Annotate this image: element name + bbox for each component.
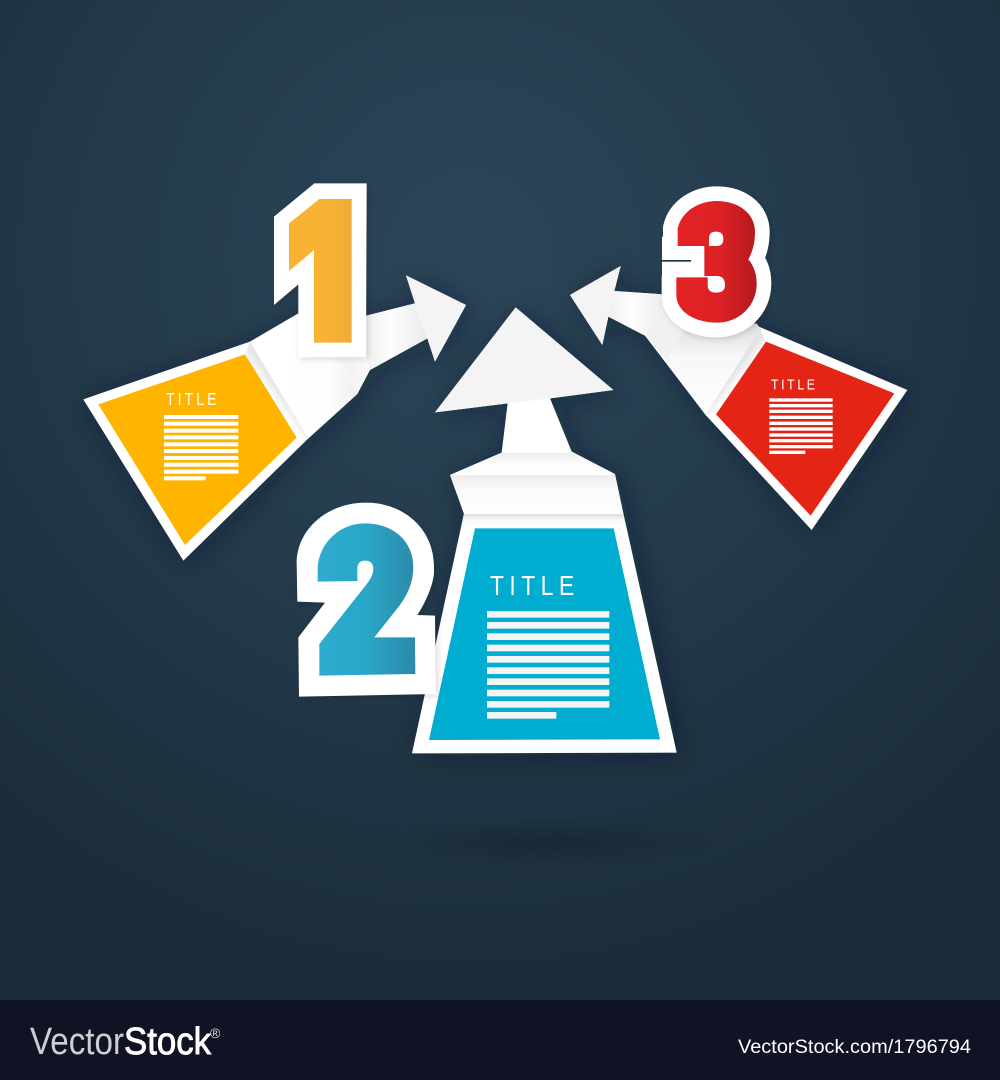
ground shadow — [375, 818, 725, 866]
arrow body — [570, 266, 907, 530]
footer logo: Vector — [30, 1021, 124, 1063]
number 2 — [297, 503, 436, 697]
shoulder fold — [450, 453, 615, 475]
arrow body — [83, 275, 466, 561]
middle fold — [667, 323, 762, 415]
blue panel — [429, 528, 660, 740]
shaft shading — [366, 303, 427, 370]
footer bar — [0, 1000, 1000, 1080]
panel edge fold — [462, 514, 627, 530]
footer logo: Stock — [124, 1021, 212, 1063]
panel 2: blue arrow — [297, 307, 677, 753]
number 1 — [274, 183, 367, 357]
panel 3 title: TITLE — [771, 377, 815, 393]
panel 2 title: TITLE — [490, 571, 574, 602]
number 3 — [662, 201, 757, 323]
shaft shading — [608, 291, 667, 336]
panel 1: yellow arrow — [83, 183, 466, 561]
footer logo: ® — [210, 1025, 221, 1041]
footer image id: VectorStock.com/1796794 — [738, 1036, 971, 1058]
number 3 outline — [662, 201, 757, 323]
panel edge fold — [706, 329, 766, 415]
red panel — [716, 342, 894, 516]
arrow body — [412, 307, 677, 753]
panel edge fold — [245, 342, 308, 438]
yellow panel — [98, 354, 297, 545]
neck fold — [450, 475, 623, 514]
panel 1 text lines — [164, 415, 238, 480]
middle fold — [277, 358, 357, 438]
neck fold — [341, 358, 369, 394]
panel 3: red arrow — [570, 201, 907, 530]
panel 3 text lines — [769, 398, 833, 454]
footer logo — [30, 1021, 221, 1063]
neck fold — [645, 303, 687, 360]
number 3 glyph — [676, 201, 757, 323]
panel 2 text lines — [487, 611, 609, 719]
panel 1 title: TITLE — [166, 391, 217, 409]
number 3 cut line — [662, 260, 691, 262]
